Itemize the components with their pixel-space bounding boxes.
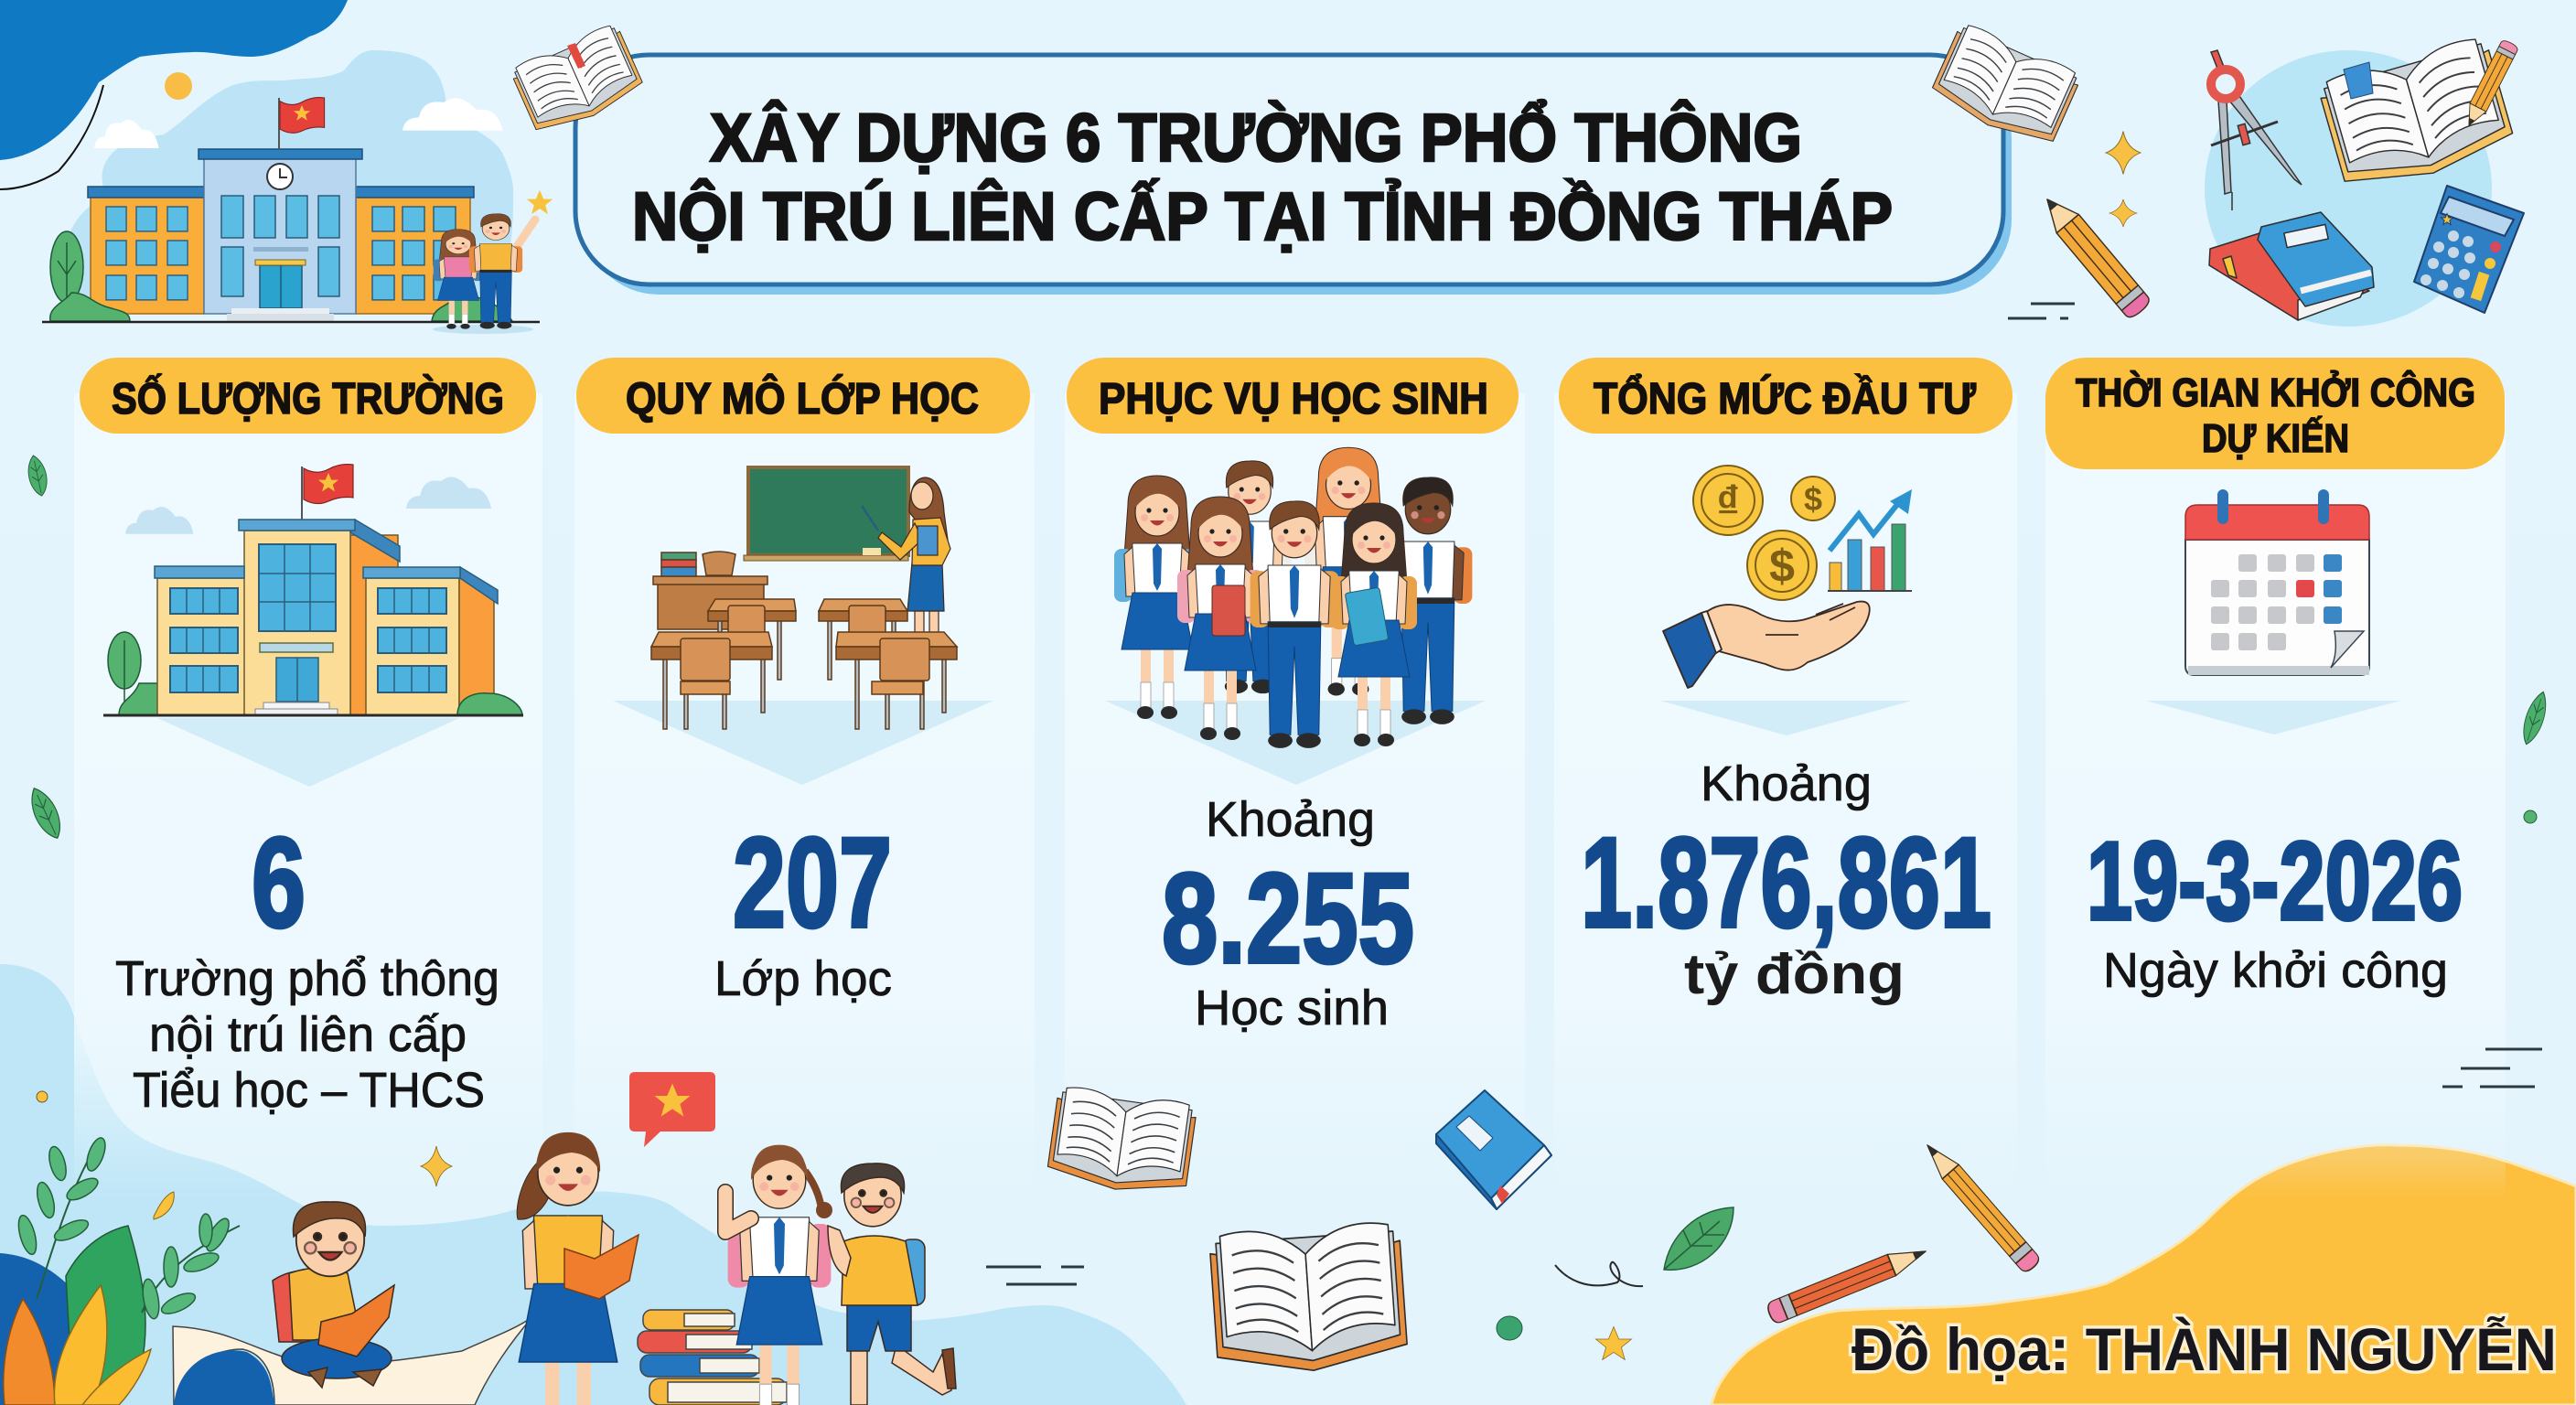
girl with book (509, 1122, 639, 1405)
teacher (862, 477, 950, 648)
value: 6 (252, 810, 306, 954)
icon: large open book (1208, 1221, 1409, 1377)
pointer triangle (613, 701, 993, 785)
title text: XÂY DỰNG 6 TRƯỜNG PHỔ THÔNG (710, 100, 1802, 176)
blackboard (744, 467, 908, 561)
pointer triangle (2146, 701, 2400, 735)
icon: small open book (1046, 1085, 1197, 1199)
decorative blob: bottom-left wave (0, 964, 1186, 1405)
pupils (434, 190, 553, 329)
icon: sparkles (2106, 132, 2141, 227)
heading pill: PHỤC VỤ HỌC SINH (1099, 375, 1488, 424)
icon: open book with picture (2316, 34, 2517, 198)
back desks (708, 599, 907, 680)
teacher desk (653, 552, 767, 629)
heading pill (1559, 358, 2012, 434)
lead-in: Khoảng (1701, 756, 1872, 811)
bottom-left illustration: foliage and pupils (0, 1072, 956, 1405)
decorative squiggle (1555, 1262, 1643, 1286)
icon: red pencil (1766, 1240, 1930, 1325)
header illustration: school with pupils (42, 50, 553, 334)
icon: calendar (2185, 489, 2369, 675)
lead-in: Khoảng (1206, 792, 1375, 847)
icon: classroom (651, 467, 957, 729)
description (115, 951, 499, 1118)
sparkle (421, 1146, 452, 1186)
dot and star (1497, 1316, 1632, 1359)
icon: red and blue books (2209, 212, 2374, 320)
description: Lớp học (714, 951, 892, 1006)
heading pill (2045, 358, 2505, 469)
panel: phục vụ học sinh (1065, 358, 1525, 1198)
growth chart (1828, 489, 1912, 591)
icon: school building (103, 465, 523, 715)
running boy (828, 1164, 956, 1405)
clouds (94, 98, 503, 148)
blue wave under paper (174, 1350, 275, 1405)
card background (1065, 393, 1525, 1198)
central block (204, 157, 356, 314)
dashes (2008, 304, 2075, 318)
pointer triangle (1105, 701, 1486, 785)
hand (1663, 602, 1870, 688)
clock (267, 164, 293, 189)
coins: $ (1804, 480, 1822, 518)
pupil pointing (725, 1136, 832, 1405)
description: nội trú liên cấp (149, 1007, 467, 1062)
description: Tiểu học – THCS (133, 1063, 485, 1118)
cloud backdrop (60, 50, 513, 311)
heading pill: THỜI GIAN KHỞI CÔNG (2076, 369, 2475, 415)
icon: pencil on book (2461, 38, 2519, 130)
decorative stationery cluster top right (2008, 34, 2524, 327)
book stack (638, 1310, 787, 1405)
title panel: NỘI TRÚ LIÊN CẤP TẠI TỈNH ĐỒNG THÁP (632, 178, 1893, 254)
icon: group of students (1114, 447, 1472, 748)
tree and bushes (50, 231, 512, 321)
panel: thời gian khởi công dự kiến (2045, 358, 2506, 1198)
decorative blob: top-left corner (0, 0, 348, 189)
value: 8.255 (1162, 846, 1414, 990)
description: Trường phổ thông (115, 951, 499, 1006)
icon: blue book (1436, 1090, 1551, 1209)
pupil shadow (433, 325, 533, 334)
panel: quy mô lớp học (574, 358, 1035, 1198)
left wing (91, 197, 204, 314)
pointer triangle (1660, 701, 1912, 735)
decorative blob: bottom-right yellow footer (1712, 1145, 2576, 1405)
heading pill: QUY MÔ LỚP HỌC (626, 373, 979, 424)
icon: pencil (2036, 190, 2152, 320)
foliage (0, 1135, 240, 1405)
right wing (356, 197, 470, 314)
heading pill (80, 358, 536, 434)
icon: yellow pencil (1919, 1138, 2042, 1274)
value: 207 (733, 810, 892, 954)
heading pill (576, 358, 1030, 434)
heading pill: DỰ KIẾN (2202, 415, 2349, 461)
description: Ngày khởi công (2103, 943, 2448, 998)
heading pill: TỔNG MỨC ĐẦU TƯ (1594, 373, 1976, 424)
description: tỷ đồng (1684, 943, 1905, 1006)
card background (2045, 393, 2506, 1198)
icon: open book on title left corner (510, 22, 647, 139)
icon: open book on title right corner (1927, 21, 2083, 152)
icon: leaf (1664, 1207, 1733, 1270)
seated boy (273, 1202, 394, 1388)
coins: $ (1769, 541, 1795, 592)
coins (1693, 466, 1835, 600)
heading pill (1067, 358, 1519, 434)
card background (1554, 393, 2017, 1198)
credit: Đồ họa: THÀNH NGUYỄN (1852, 1315, 2557, 1383)
card background (574, 393, 1035, 1198)
icon: compass (2211, 50, 2302, 210)
ground line (42, 321, 540, 323)
value: 1.876,861 (1581, 810, 1991, 954)
paper sheet (173, 1317, 532, 1405)
icon: coins, chart and hand (1663, 466, 1912, 688)
title panel (575, 55, 2012, 295)
side decorations: leaves and dots (25, 454, 2551, 1102)
card background (74, 393, 542, 1198)
cluster backdrop circle (2205, 50, 2492, 327)
title shadow (584, 64, 2012, 295)
pointer triangle (157, 718, 459, 787)
flag speech bubble (629, 1072, 715, 1147)
windows (106, 207, 456, 300)
dashes near bottom centre (986, 1267, 1084, 1284)
heading pill: SỐ LƯỢNG TRƯỜNG (112, 373, 504, 424)
panel: tổng mức đầu tư (1554, 358, 2017, 1198)
panel: số lượng trường (74, 358, 542, 1198)
flag (279, 98, 325, 149)
title box (575, 55, 2003, 284)
coins: ₫ (1716, 477, 1740, 528)
description: Học sinh (1195, 981, 1389, 1035)
sun (165, 72, 192, 100)
icon: calculator (2414, 186, 2524, 313)
front desks (651, 632, 957, 729)
